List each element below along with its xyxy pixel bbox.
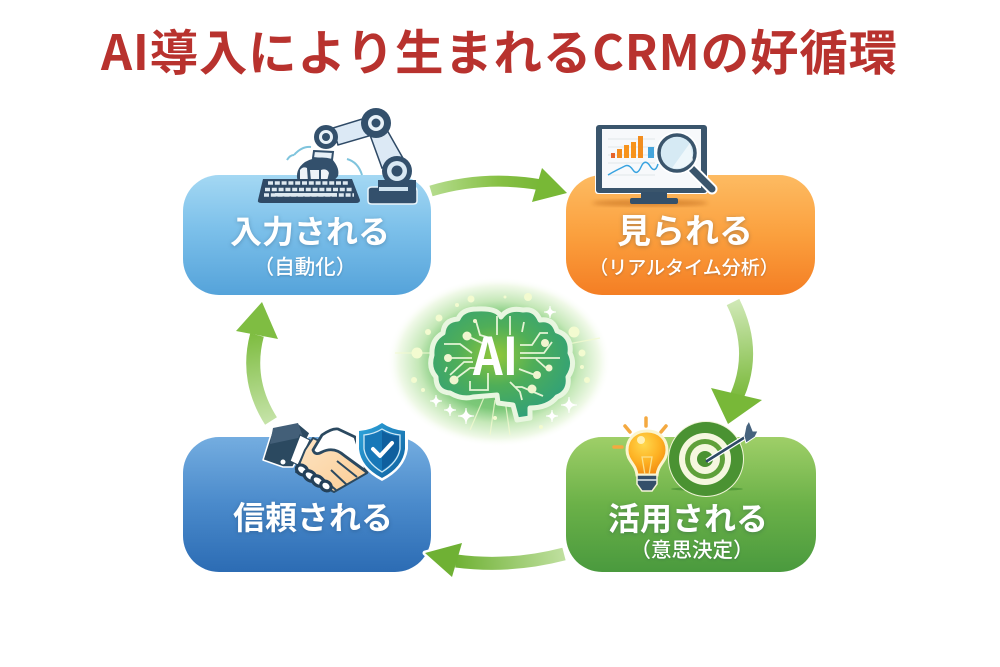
circuit traces: [444, 316, 560, 400]
subheading: real-time analysis: （リアルタイム分析）: [589, 253, 779, 280]
icon: handshake and shield: [263, 420, 408, 493]
arrow: input to seen: [431, 168, 567, 202]
heading: seen: 見られる: [617, 204, 753, 253]
arrow: trusted to input: [236, 302, 278, 421]
rays: [395, 338, 600, 435]
icon: light bulb and target with dart: [614, 418, 758, 497]
AI label: AI: [472, 315, 518, 390]
heading: trusted: 信頼される: [233, 493, 393, 539]
icon: robot arm typing on keyboard: [258, 108, 417, 204]
arrow: seen to used: [711, 302, 762, 424]
panel: used: [566, 437, 816, 572]
sparkles: [430, 306, 577, 424]
subheading: decision making: （意思決定）: [630, 533, 754, 563]
arrow: used to trusted: [425, 543, 564, 577]
heading: input: 入力される: [230, 207, 390, 253]
icon: monitor with chart and magnifier: [592, 124, 712, 206]
subheading: automation: （自動化）: [254, 250, 356, 280]
panel: input: [183, 175, 431, 295]
title: AI導入により生まれるCRMの好循環: [100, 14, 897, 84]
heading: used: 活用される: [608, 494, 768, 540]
panel: seen: [566, 175, 815, 295]
panel: trusted: [183, 437, 431, 572]
brain outline: [431, 309, 573, 420]
glow: [387, 277, 611, 447]
icon: AI brain: [387, 277, 611, 447]
